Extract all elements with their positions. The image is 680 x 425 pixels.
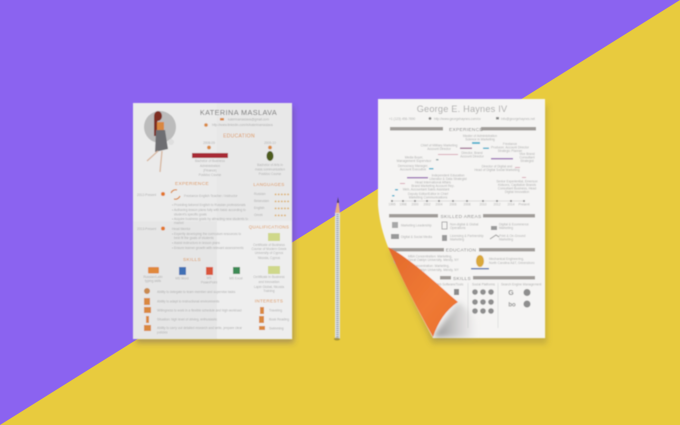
experience timeline: Independent Education [432, 174, 465, 178]
timeline axis [388, 200, 530, 206]
interests: INTERESTS [255, 298, 283, 304]
interests: Book Reading [269, 318, 289, 322]
languages [253, 182, 291, 218]
languages: ★★★★★ [274, 206, 291, 210]
curl shadow on paper [433, 302, 477, 339]
languages: ★★★★ [274, 214, 287, 218]
skilled areas items [391, 222, 529, 242]
left resume: Katerina Maslava [133, 103, 294, 343]
experience timeline: Master of Administration [463, 134, 497, 138]
education entries: North Carolina A&T, Greensboro [489, 261, 535, 265]
experience timeline: Deputy Editor/Editor in Chief [408, 192, 448, 196]
education entries [192, 141, 285, 177]
experience entry two: • Ensure learner growth with relevant assessments [172, 246, 244, 250]
skilled areas items: Digital & Social Media [401, 235, 432, 239]
education entries: (Finance) [203, 168, 217, 172]
software icons: PowerPoint [201, 280, 217, 284]
interests [255, 298, 289, 330]
skills columns: bo [508, 302, 516, 308]
experience timeline: Science in Marketing [465, 138, 495, 142]
qualifications: Lapin Global, Nicosia [254, 285, 284, 289]
skills heading [440, 276, 535, 282]
skills columns: Search Engine Management [501, 282, 542, 286]
experience entry two: • Expertly developing the curriculum resources to [172, 232, 241, 236]
education entries: mass communication [255, 168, 285, 172]
experience entry one: • Acquire business goals by attracting new students to [172, 217, 248, 221]
education entries: Postdoc Course [259, 172, 282, 176]
contact row: info@georgehaynes.net [501, 117, 535, 121]
software icons: typing skills [145, 279, 162, 283]
experience timeline: Director, Brand [461, 151, 483, 155]
contact lines [204, 118, 273, 127]
name: George E. Haynes IV [417, 104, 508, 114]
experience timeline: Consultant [519, 156, 535, 160]
education entries [394, 254, 535, 272]
timeline axis: 2004 [435, 202, 443, 206]
experience timeline: Head International Affairs [415, 180, 451, 184]
experience timeline: Producer, Account Director [491, 146, 530, 150]
experience heading: EXPERIENCE [175, 181, 209, 187]
qualifications [249, 224, 289, 293]
experience entry two [137, 226, 244, 250]
contact row [389, 117, 535, 121]
portrait [144, 111, 176, 172]
experience timeline: Strategic Planner [498, 149, 523, 153]
experience entry two: • Assist instructors in lesson plans [172, 241, 220, 245]
education heading: EDUCATION [446, 248, 477, 254]
experience timeline: Liberator & Data Strategist [429, 177, 467, 181]
skilled areas items: Marketing Leadership [401, 224, 432, 228]
education entries: Great Oaklyn University, Mendy, NY [408, 258, 460, 262]
skill list [144, 288, 243, 334]
education entries: Bachelor of Arts in [257, 163, 283, 167]
languages: ★★★★★ [274, 200, 291, 204]
skilled areas items: Licensing & Partnership [450, 234, 484, 238]
experience timeline: Director of Digital and [482, 164, 513, 168]
education entries: MBA Concentration: Marketing, [408, 254, 452, 258]
experience timeline: Digital Innovation [505, 190, 529, 194]
skilled areas items: Print & On-Ground [499, 234, 526, 238]
experience heading [390, 127, 536, 133]
experience timeline: Kidsons, Capitalize Brands [498, 183, 536, 187]
skilled areas items: Marketing [450, 238, 464, 242]
experience timeline: Strategist [520, 159, 534, 163]
experience timeline: Vice Brand [519, 152, 535, 156]
qualifications: Certificate in Business [253, 275, 285, 279]
skills heading: SKILLS [183, 257, 201, 263]
skilled areas items: Marketing [499, 226, 513, 230]
qualifications: and Innovation [259, 280, 280, 284]
skills columns: Social Platforms [472, 282, 495, 286]
experience entry one: • Providing tailored English to Russian professionals [172, 203, 246, 207]
software icons: MS Excel [229, 276, 243, 280]
skilled areas items: Non-digital & Global [450, 222, 479, 226]
experience entry two: best fit the goals of students [174, 236, 214, 240]
pencil [334, 197, 340, 340]
experience entry two: 2013-Present [137, 227, 156, 231]
experience timeline: Web, Accountant Sales Assistant [403, 188, 449, 192]
experience timeline: Marketing Communications [409, 195, 448, 199]
timeline axis: 2012 [493, 202, 501, 206]
contact row: http://www.georgehaynes.com/cv [434, 117, 481, 121]
experience entry one: student's specific goals [174, 212, 207, 216]
software icons [143, 267, 243, 284]
skill list: Ability to carry out detailed research and write, prepare clear [157, 326, 243, 330]
education entries: Administration [200, 164, 220, 168]
timeline axis: 2006 [449, 202, 457, 206]
experience timeline: Brand Marketing Account Rep. [411, 184, 455, 188]
interests: Traveling [269, 308, 282, 312]
skill list: Ability to delegate to team member and supervise tasks [157, 290, 236, 294]
languages: Greek [254, 213, 263, 217]
education entries: Mechanical Engineering, [489, 257, 524, 261]
timeline axis: 1995 [388, 202, 396, 206]
skilled areas heading [389, 214, 535, 220]
qualifications: Nicosia, Cyprus [258, 256, 281, 260]
software icons: MS [207, 276, 211, 280]
qualifications: Training [263, 289, 275, 293]
qualifications: University of Cyprus [255, 251, 284, 255]
skills columns: G [508, 290, 514, 297]
languages: English [254, 206, 265, 210]
skill list: Willingness to work in a flexible schedule and high workload [157, 308, 242, 312]
page curl: orange underside [388, 247, 458, 337]
experience timeline: Democracy Manager, [398, 164, 428, 168]
contact lines: http://www.linkedin.com/in/katerinamaslava [212, 123, 273, 127]
education heading: EDUCATION [223, 134, 255, 140]
education entries: 2008-09 [203, 141, 215, 145]
education entries: Bachelor of Business [195, 159, 225, 163]
timeline axis: Present [518, 202, 530, 206]
timeline axis: 2010 [479, 202, 487, 206]
experience entry one: 2012-Present [137, 193, 156, 197]
experience heading: EXPERIENCE [449, 127, 483, 133]
experience timeline: Consultant Business, Head [498, 186, 536, 190]
skill list: Situation: high level of driving, enthusiastic [157, 318, 217, 322]
experience timeline: Account Director [427, 147, 452, 151]
skills heading: SKILLS [453, 276, 471, 282]
experience timeline: Senior Experiential, Emerson [496, 180, 538, 184]
timeline axis: 2002 [423, 202, 431, 206]
software icons: Russian/Latin [143, 275, 163, 279]
qualifications: Certificate of Business [253, 243, 285, 247]
timeline axis: 2014 [507, 202, 515, 206]
name: KATERINA MASLAVA [200, 108, 277, 117]
experience entry one [137, 190, 248, 225]
experience entry one: Freelance English Teacher / Instructor [184, 194, 239, 198]
interests: Swimming [269, 326, 284, 330]
timeline axis: 2008 [463, 202, 471, 206]
skilled areas items: Operations [450, 226, 466, 230]
skilled areas heading: SKILLED AREAS [441, 214, 481, 220]
education entries: Postdoc Course [199, 173, 222, 177]
skilled areas items: Marketing [499, 238, 513, 242]
experience timeline: Media Buyer, [405, 156, 424, 160]
education entries: Great Oaklyn University, Mendy, NY [408, 268, 460, 272]
skilled areas items: Digital & Ecommerce [499, 222, 529, 226]
languages: Russian [254, 192, 266, 196]
software icons: MS Word [175, 276, 189, 280]
skills columns [435, 282, 542, 328]
contact row: +1 (123) 456-7890 [389, 117, 416, 121]
languages: ★★★★★ [274, 192, 291, 196]
experience timeline: Chief of Military Marketing [421, 144, 458, 148]
timeline axis: 1998 [399, 202, 407, 206]
timeline axis: 2000 [411, 202, 419, 206]
experience entry two: Head Mentor [172, 227, 191, 231]
right resume: George E. Haynes IV [378, 99, 547, 344]
experience timeline: Account Director [460, 154, 485, 158]
skill list: Ability to adapt to instructional environments [157, 300, 220, 304]
contact lines: katerinamaslava@gmail.com [228, 118, 269, 122]
experience entry one: market [174, 221, 184, 225]
experience entry one: • Authoring lesson plans fully with basic according to [172, 208, 246, 212]
education entries: BA Concentration: Marketing, [408, 264, 450, 268]
languages: Belarusian [254, 199, 269, 203]
experience timeline [392, 134, 538, 199]
skill list: policies [157, 330, 168, 334]
skills columns: Web Software/Tools [435, 282, 464, 286]
experience timeline: Head of Digital Social Marketing [474, 168, 520, 172]
qualifications: Course of Modern Greek [251, 247, 287, 251]
experience timeline: Management Supervisor [397, 159, 432, 163]
languages: LANGUAGES [253, 182, 285, 187]
experience timeline: Freelance [503, 142, 517, 146]
education entries: 2009-10 [264, 141, 276, 145]
qualifications: QUALIFICATIONS [249, 224, 289, 230]
experience timeline: Account Executive [400, 168, 426, 172]
education heading [390, 248, 535, 254]
